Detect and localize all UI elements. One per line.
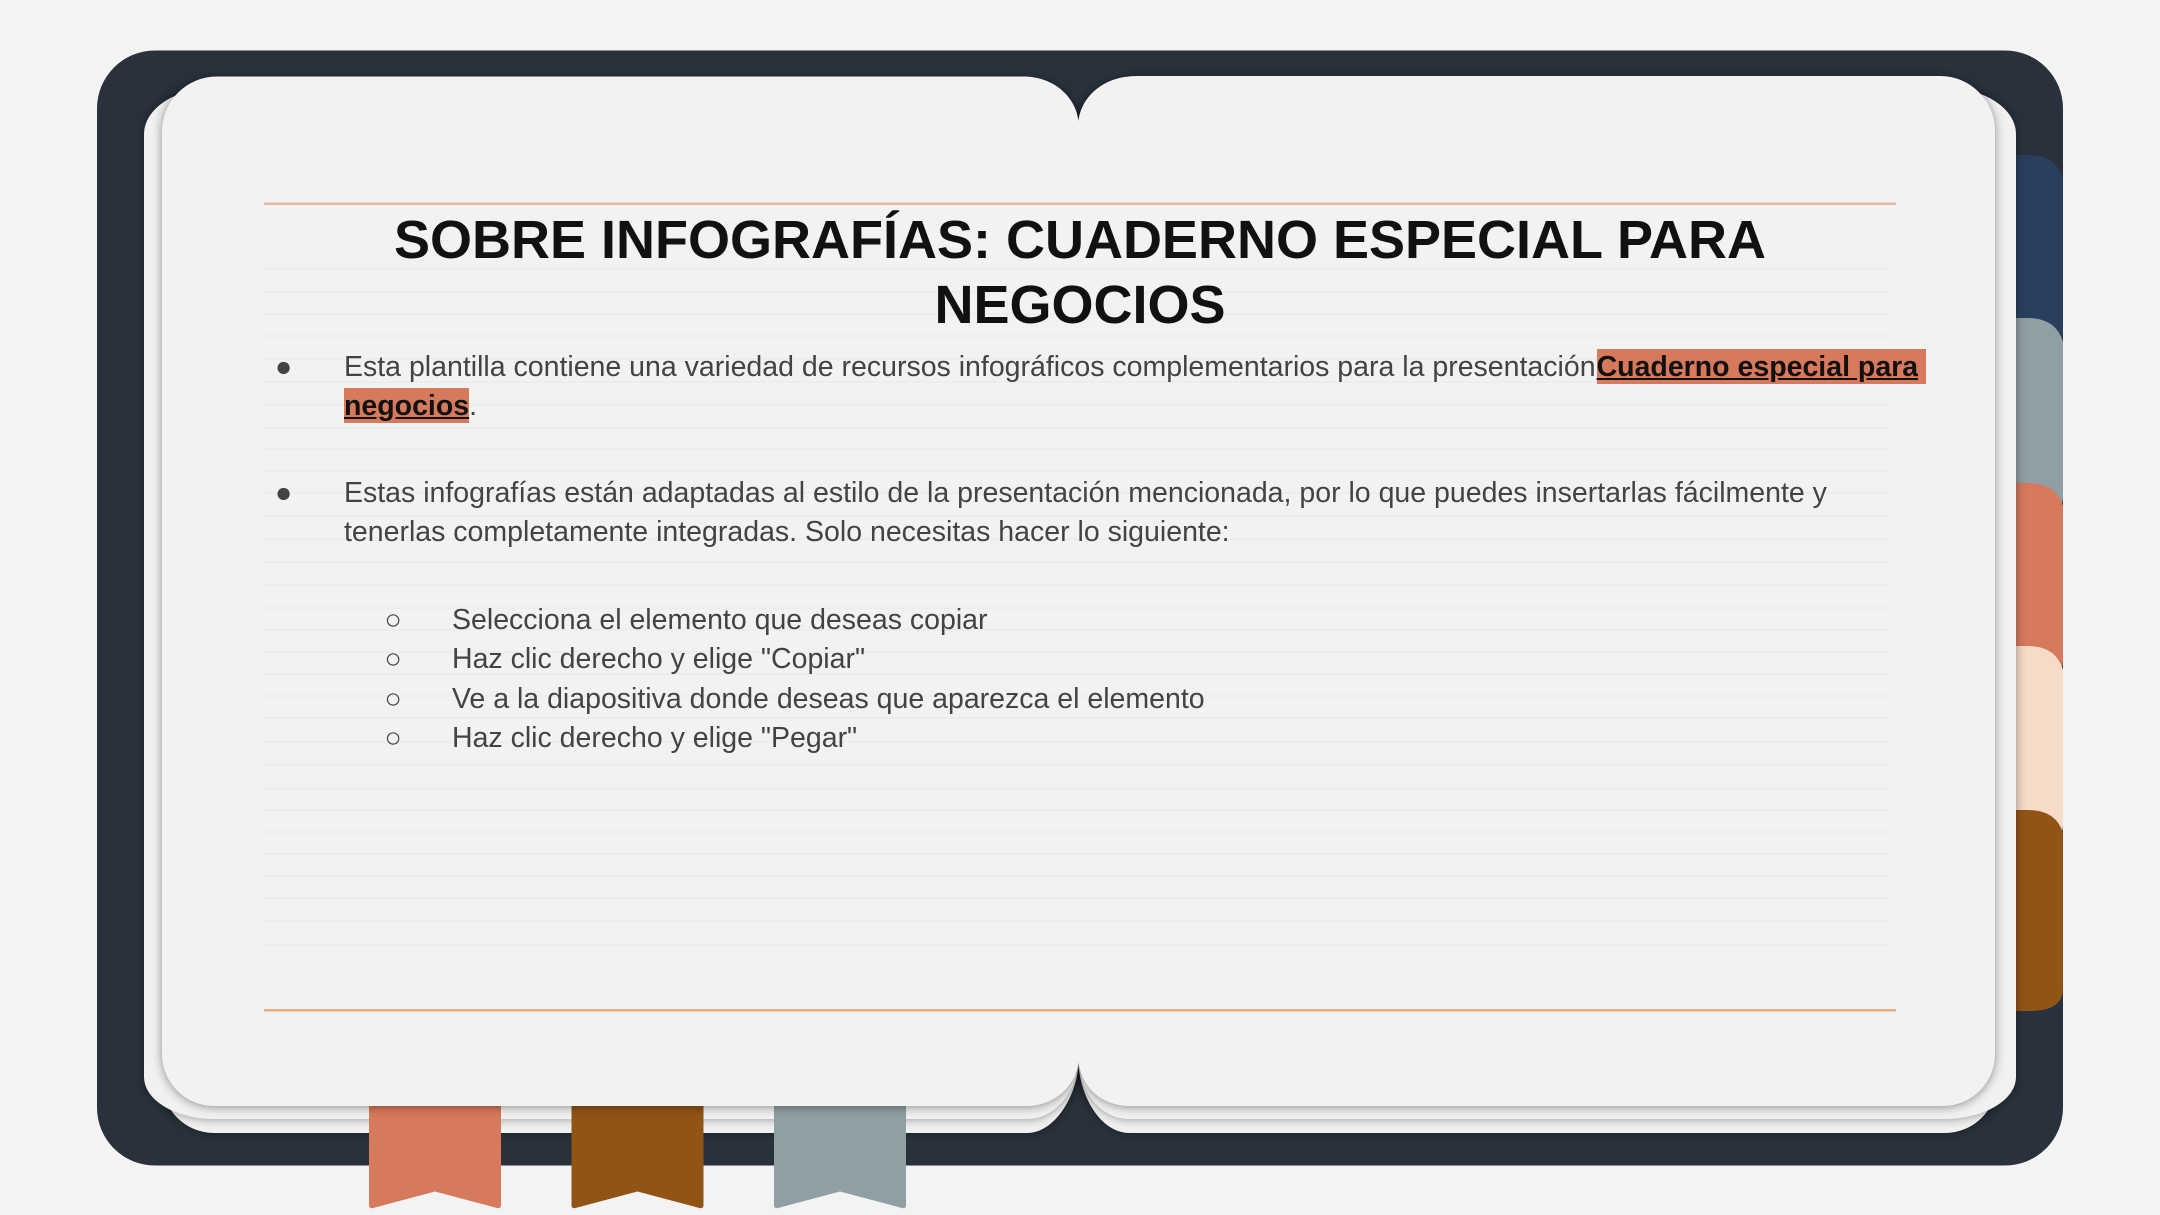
back page layer	[162, 90, 1997, 1133]
sub-list of steps: ○	[384, 722, 402, 754]
bottom rule	[264, 1009, 1896, 1012]
index tabs	[2016, 155, 2063, 1011]
middle page layer	[144, 88, 2016, 1119]
bullet point 2: tenerlas completamente integradas. Solo necesitas hacer lo siguiente:	[344, 516, 1230, 548]
tab: coral	[2016, 483, 2063, 683]
tab: navy	[2016, 155, 2063, 356]
sub-list of steps: Ve a la diapositiva donde deseas que aparezca el elemento	[452, 683, 1205, 715]
bullet point 1: Esta plantilla contiene una variedad de recursos infográficos complementarios para la presentaciónCuaderno especial para	[344, 351, 1918, 383]
sub-list of steps: ○	[384, 643, 402, 675]
bookmark: coral	[369, 1090, 501, 1208]
title: SOBRE INFOGRAFÍAS: CUADERNO ESPECIAL PARA	[394, 210, 1766, 270]
bullet point 2: ●	[275, 477, 292, 509]
bullet point 1	[275, 349, 1926, 423]
bullet point 1: ●	[275, 351, 292, 383]
tab: sage	[2016, 318, 2063, 519]
bullet point 2	[275, 477, 1827, 548]
bookmark: brown	[572, 1090, 704, 1208]
bullet point 1: negocios.	[344, 390, 477, 422]
tab: brown	[2016, 810, 2063, 1011]
sub-list of steps: Haz clic derecho y elige "Copiar"	[452, 643, 865, 675]
top rule	[264, 202, 1896, 205]
title: NEGOCIOS	[934, 275, 1226, 335]
sub-list of steps: Selecciona el elemento que deseas copiar	[452, 604, 988, 636]
bookmark: sage	[774, 1090, 906, 1208]
bullet point 2: Estas infografías están adaptadas al estilo de la presentación mencionada, por lo que puedes insertarlas fácilmente y	[344, 477, 1827, 509]
title	[394, 210, 1766, 335]
front page	[162, 76, 1995, 1106]
sub-list of steps: Haz clic derecho y elige "Pegar"	[452, 722, 857, 754]
bookmarks	[369, 1090, 906, 1208]
sub-list of steps: ○	[384, 604, 402, 636]
sub-list of steps	[384, 604, 1205, 754]
tab: peach	[2016, 646, 2063, 847]
sub-list of steps: ○	[384, 683, 402, 715]
bullet list	[275, 349, 1926, 754]
